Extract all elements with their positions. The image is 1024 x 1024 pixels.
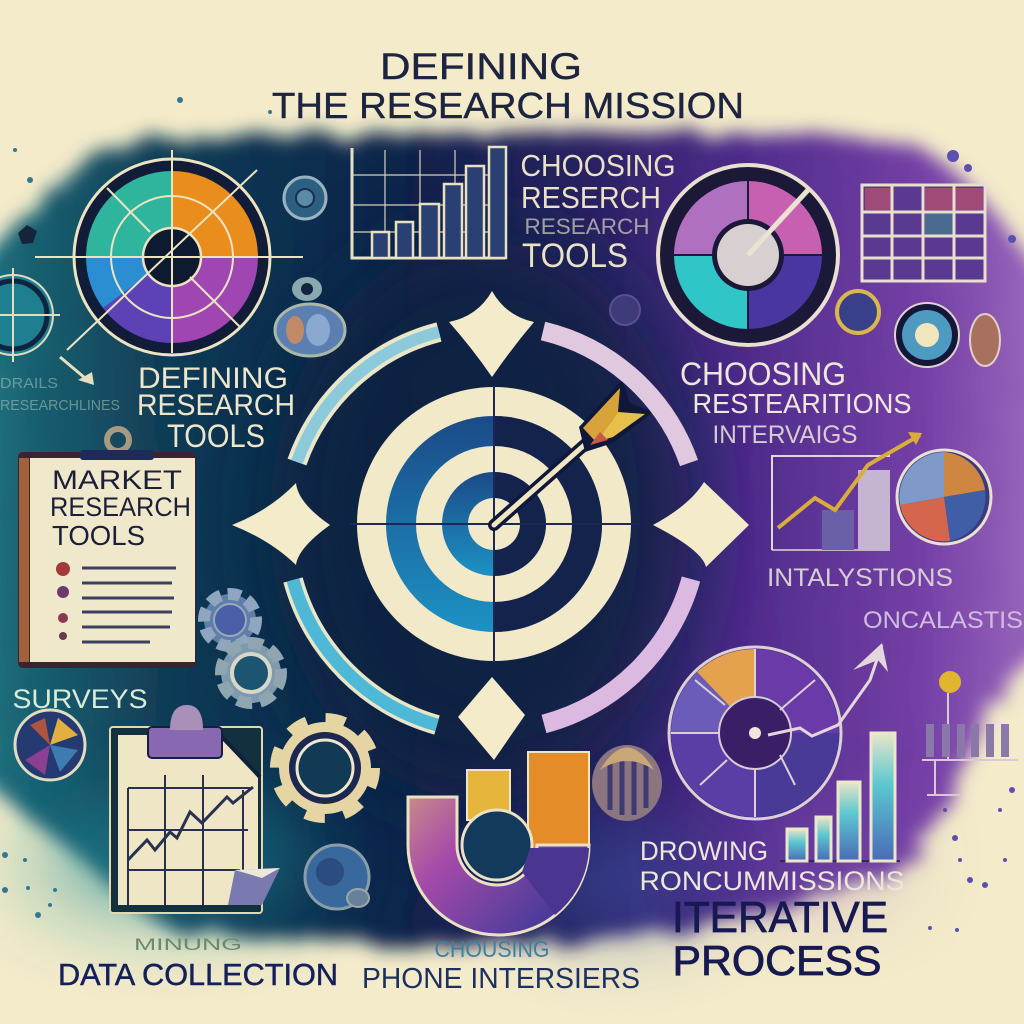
text: choosing research tools: TOOLS [522,237,628,275]
title: THE RESEARCH MISSION [272,85,744,126]
icon: seashell [592,745,662,821]
icon: right pie [897,450,991,544]
text: drowing ronconcumissions: DROWING [640,836,768,866]
text: defining research tools: RESEARCH [137,389,295,422]
text: surveys: SURVEYS [12,684,148,714]
bar chart: lower right [780,733,900,861]
icon: small left badges [275,177,640,356]
panel: data clipboard chart [110,705,280,913]
text: defining research tools: TOOLS [167,418,265,454]
faint left labels [0,375,120,414]
clipboard heading: MARKET [52,465,182,495]
title: DEFINING [380,46,582,87]
text: oncalastis: ONCALASTIS [863,607,1023,634]
diamond markers [232,291,749,760]
text: intalysistions: INTALYSTIONS [767,564,953,592]
text: choosing research tools: RESERCH [521,180,661,215]
text: iterative process: PROCESS [672,937,882,984]
icons: gears [204,594,281,703]
text: choosing phone intersiers: CHOUSING [434,936,550,962]
icon: surveys badge [15,710,85,780]
text: choosing phone intersiers [362,936,640,995]
icon: globe badge [305,845,369,909]
icon: top left pie wheel [35,150,303,355]
table grid icon [862,185,985,281]
bar chart: top middle [352,147,506,258]
text: defining research tools: DEFINING [138,362,288,395]
clipboard list [56,562,176,642]
icon: big gear [275,718,375,818]
outer arcs [293,331,691,725]
icon: pin and small bars [922,671,1018,795]
clipboard heading [50,465,191,551]
icon: left crosshair [0,225,94,385]
text: drowing ronconcumissions: RONCUMMISSIONS [640,866,904,896]
text: choosing researtions interviews: RESTEARITIONS [692,388,912,419]
clipboard heading: RESEARCH [50,492,191,522]
faint left labels: DRAILS [0,375,58,392]
text: choosing phone intersiers: PHONE INTERSIERS [362,963,640,995]
clipboard heading: TOOLS [52,520,145,551]
central target [232,291,749,760]
text: choosing research tools: RESEARCH [524,214,650,239]
icons: small right badges [837,291,1000,367]
text: defining research tools [137,362,295,454]
title [272,46,744,126]
text: faint minor label: MINUNG [134,935,242,954]
text: choosing researtions interviews: CHOOSING [680,356,846,392]
icon: lower right pie wheel [669,643,888,819]
text: drowing ronconcumissions [640,836,904,896]
panel: market research clipboard [18,429,196,668]
faint left labels: RESEARCHLINES [0,397,120,414]
chart: rising line bars [772,432,922,550]
text: data collection: DATA COLLECTION [58,957,338,992]
text: choosing researtions interviews [680,356,912,449]
text: choosing researtions interviews: INTERVAIGS [712,421,858,449]
text: iterative process [672,893,888,984]
text: iterative process: ITERATIVE [672,893,888,942]
arrow [494,380,653,525]
target rings [350,385,640,663]
icon: U chart [408,752,589,935]
text: choosing research tools: CHOOSING [520,148,676,183]
icon: top right pie wheel [658,165,838,345]
text: choosing research tools [520,148,676,275]
